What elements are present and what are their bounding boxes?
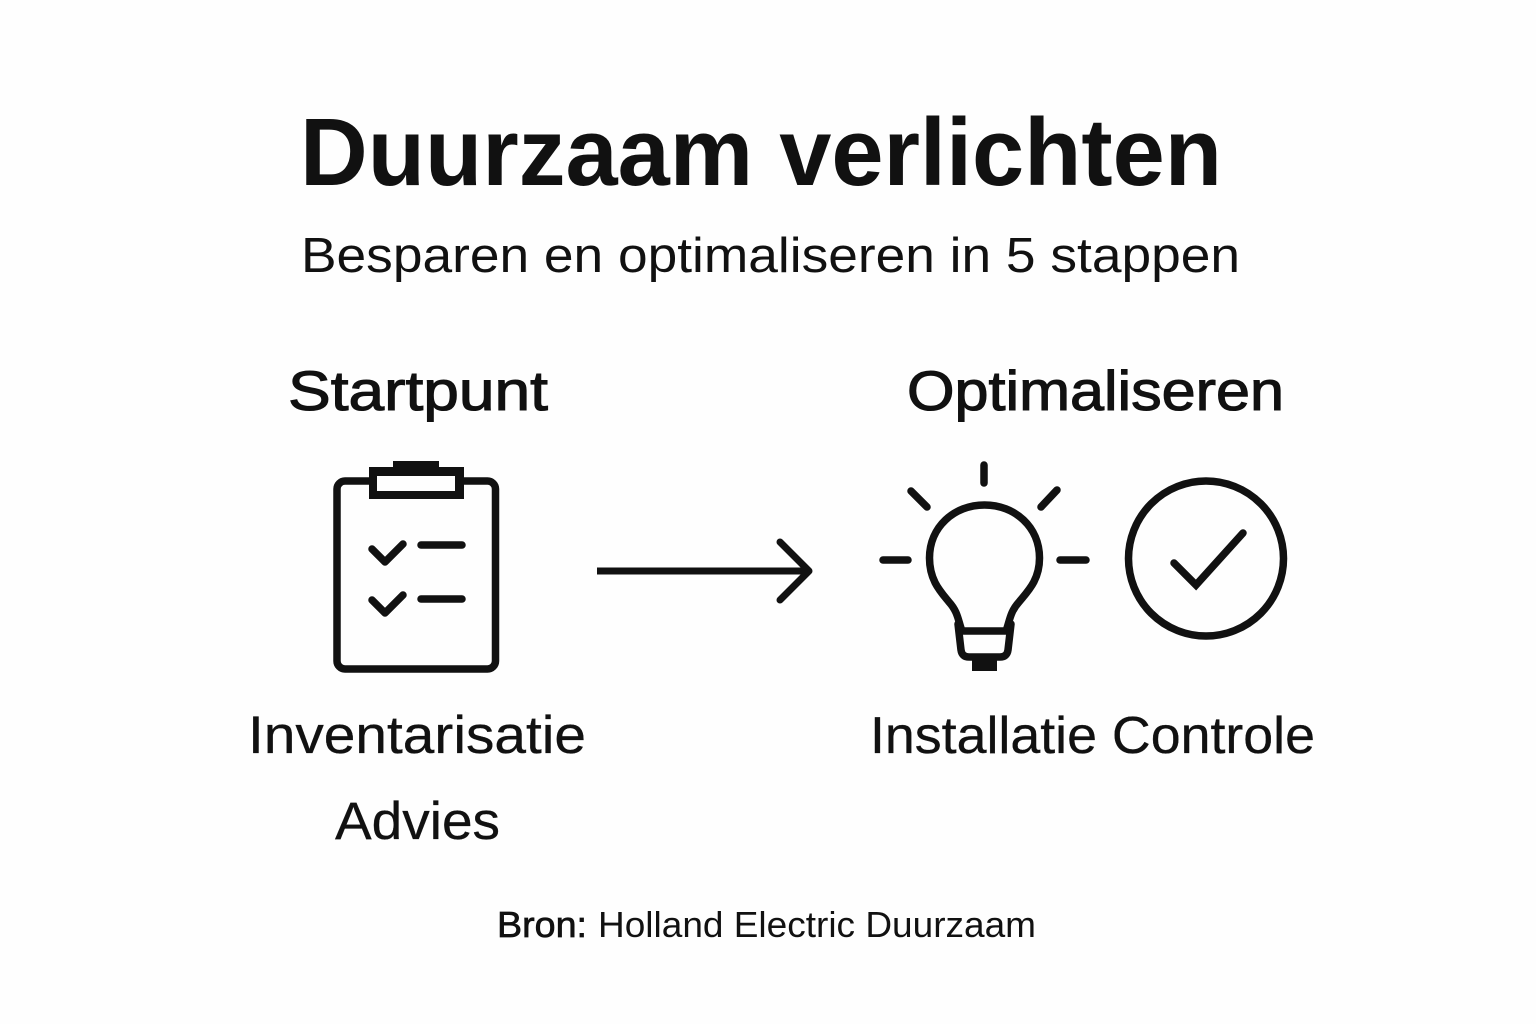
heading: Startpunt: Startpunt	[288, 359, 548, 422]
label: Installatie Controle: Installatie Controle	[870, 707, 1315, 765]
icon: light bulb	[883, 465, 1086, 671]
heading: Optimaliseren: Optimaliseren	[907, 359, 1284, 422]
source note: Bron:	[497, 904, 587, 945]
label: Inventarisatie: Inventarisatie	[248, 706, 586, 765]
icon: clipboard checklist	[337, 461, 496, 669]
arrow	[597, 542, 809, 600]
subtitle: Besparen en optimaliseren in 5 stappen	[301, 228, 1240, 283]
source note: Holland Electric Duurzaam	[598, 904, 1036, 945]
label: Advies: Advies	[335, 792, 500, 851]
icon: check circle	[1128, 481, 1284, 636]
title: Duurzaam verlichten	[300, 99, 1222, 206]
